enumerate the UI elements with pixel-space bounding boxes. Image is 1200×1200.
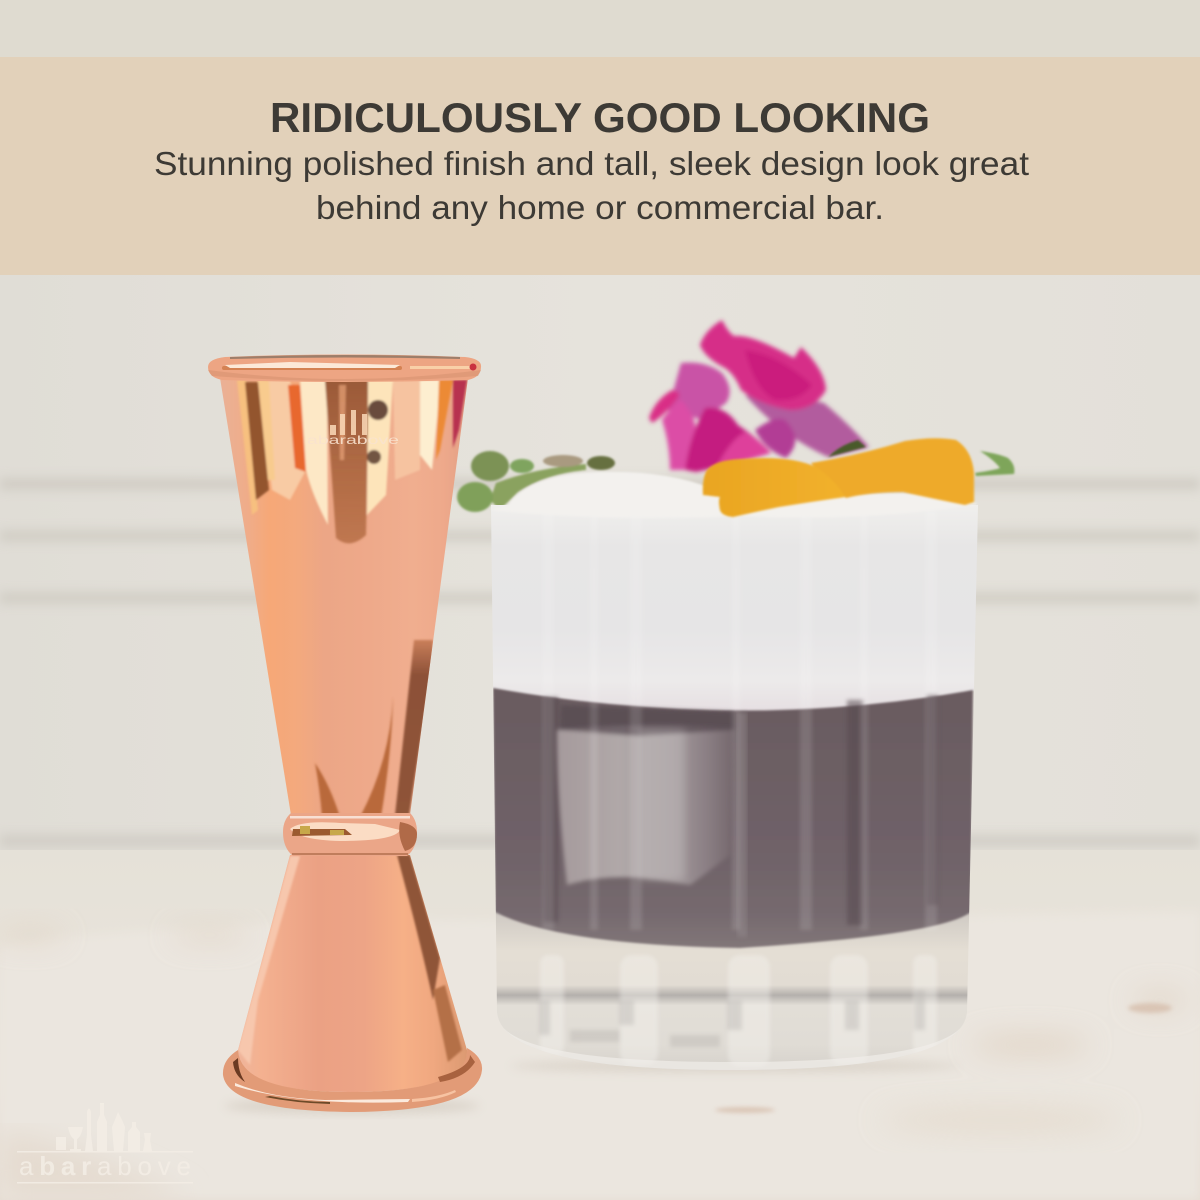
engraved logo: abarabove <box>307 433 400 447</box>
brand logo <box>17 1103 193 1184</box>
lower cone <box>238 855 467 1092</box>
logo wordmark: abarabove <box>19 1151 191 1181</box>
base flutes <box>540 955 937 1067</box>
description text: Stunning polished finish and tall, sleek design look great <box>154 145 1029 182</box>
centre collar <box>283 813 417 856</box>
foam <box>491 505 978 712</box>
flower calyx <box>828 440 866 457</box>
citrus peel garnish <box>703 438 974 517</box>
description text: behind any home or commercial bar. <box>316 189 884 226</box>
glass base <box>496 900 969 1062</box>
ice cube <box>557 705 735 885</box>
engraved logo <box>325 410 398 444</box>
logo bottles icon <box>56 1103 152 1151</box>
upper cone <box>220 378 468 817</box>
banner panel <box>0 57 1200 275</box>
rim <box>208 354 481 382</box>
whisky glass <box>490 472 980 1075</box>
flutes <box>542 694 938 930</box>
top band background <box>0 0 1200 57</box>
dark cocktail <box>493 688 973 948</box>
shadows on counter <box>224 1060 960 1114</box>
foam top <box>491 472 978 518</box>
heading: RIDICULOUSLY GOOD LOOKING <box>270 94 930 141</box>
flower garnish <box>457 320 1014 512</box>
green stem and buds <box>457 451 1014 512</box>
foot ring <box>223 1048 482 1112</box>
jigger <box>208 354 482 1112</box>
pink petals <box>649 320 869 472</box>
description text <box>154 145 1029 226</box>
